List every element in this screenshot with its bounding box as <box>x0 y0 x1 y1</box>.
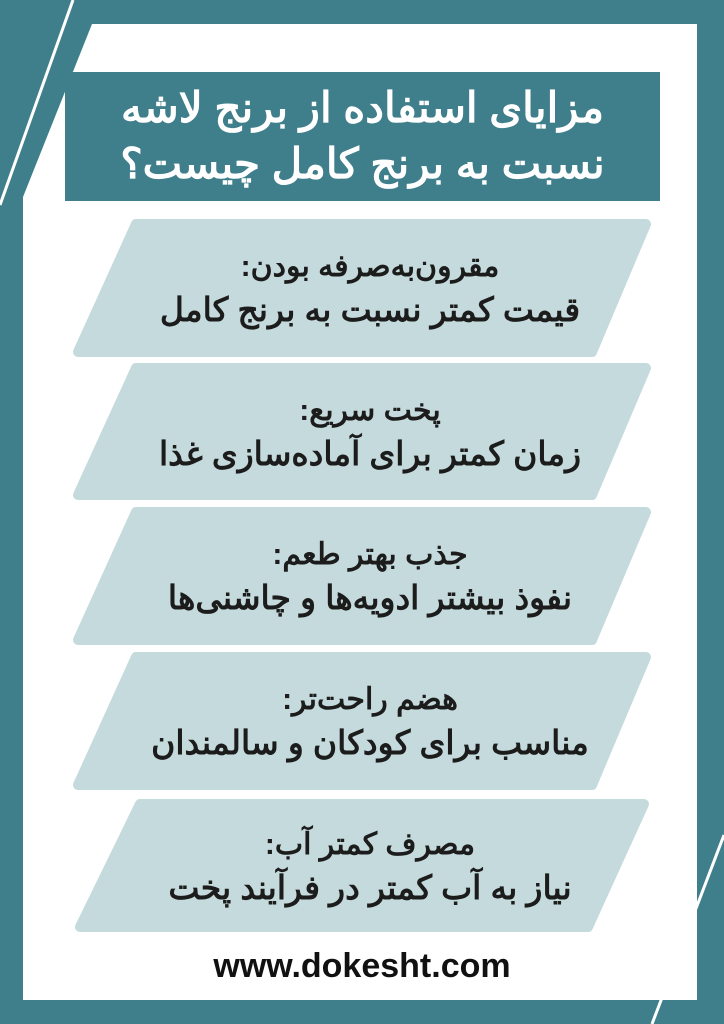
card 1 <box>78 224 646 352</box>
card text 1: قیمت کمتر نسبت به برنج کامل <box>160 291 580 328</box>
website url: www.dokesht.com <box>213 947 511 985</box>
card text 1 <box>160 250 580 330</box>
card text 5: مصرف کمتر آب: <box>265 828 475 861</box>
card text 3 <box>168 538 572 618</box>
card 5 <box>80 804 644 927</box>
title: نسبت به برنج کامل چیست؟ <box>120 140 605 187</box>
title: مزایای استفاده از برنج لاشه <box>121 84 604 131</box>
card text 1: مقرون‌به‌صرفه بودن: <box>241 250 499 283</box>
card text 5: نیاز به آب کمتر در فرآیند پخت <box>168 869 572 906</box>
card text 4 <box>151 683 589 763</box>
card text 4: هضم راحت‌تر: <box>282 683 458 716</box>
card 2 <box>78 368 646 495</box>
card text 3: جذب بهتر طعم: <box>272 538 468 571</box>
card text 2: زمان کمتر برای آماده‌سازی غذا <box>159 435 581 472</box>
card text 2: پخت سریع: <box>299 394 441 427</box>
card 3 <box>78 512 646 640</box>
card text 2 <box>159 394 581 474</box>
card text 3: نفوذ بیشتر ادویه‌ها و چاشنی‌ها <box>168 579 572 616</box>
card 4 <box>78 657 646 785</box>
card text 4: مناسب برای کودکان و سالمندان <box>151 724 589 761</box>
title bar <box>65 72 660 201</box>
title <box>120 84 605 189</box>
card text 5 <box>168 825 572 908</box>
